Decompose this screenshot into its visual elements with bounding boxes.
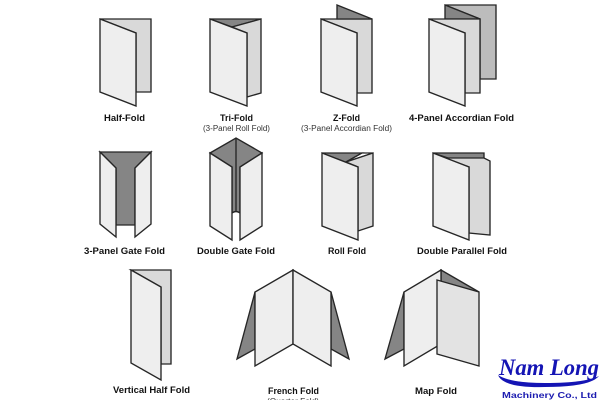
- label: tri-fold: (3-Panel Roll Fold): [203, 124, 270, 133]
- label: roll fold: Roll Fold: [328, 246, 366, 257]
- diagram: roll fold: [322, 153, 373, 240]
- label: vertical half fold: Vertical Half Fold: [113, 385, 190, 396]
- label: double parallel fold: Double Parallel Fold: [417, 246, 507, 257]
- diagram: tri-fold: [210, 19, 261, 106]
- label: z-fold: Z-Fold: [333, 113, 360, 124]
- logo: Nam Long Machinery: [498, 355, 599, 400]
- label: z-fold: [301, 113, 392, 133]
- diagram: z-fold: [321, 5, 372, 106]
- label: tri-fold: Tri-Fold: [220, 113, 253, 124]
- label: half-fold: Half-Fold: [104, 113, 145, 124]
- diagram: map fold: [385, 270, 479, 366]
- label: 3-panel gate fold: 3-Panel Gate Fold: [84, 246, 165, 257]
- label: 4-panel accordian fold: 4-Panel Accordian Fold: [409, 113, 514, 124]
- diagram: 4-panel accordian fold: [429, 5, 496, 106]
- label: double gate fold: Double Gate Fold: [197, 246, 275, 257]
- label: french fold: French Fold: [268, 386, 319, 397]
- logo wordmark: Nam Long: [498, 355, 599, 380]
- diagram: half-fold: [100, 19, 151, 106]
- diagram: double gate fold: [210, 138, 262, 240]
- label: map fold: Map Fold: [415, 386, 457, 397]
- diagram: 3-panel gate fold: [100, 152, 151, 237]
- label: tri-fold: [203, 113, 270, 133]
- diagram: double parallel fold: [433, 153, 490, 240]
- logo swoosh: [498, 375, 599, 387]
- diagram: vertical half fold: [131, 270, 171, 380]
- label: z-fold: (3-Panel Accordian Fold): [301, 124, 392, 133]
- logo company name: Machinery Co., Ltd: [502, 391, 597, 400]
- diagram: french fold: [237, 270, 349, 366]
